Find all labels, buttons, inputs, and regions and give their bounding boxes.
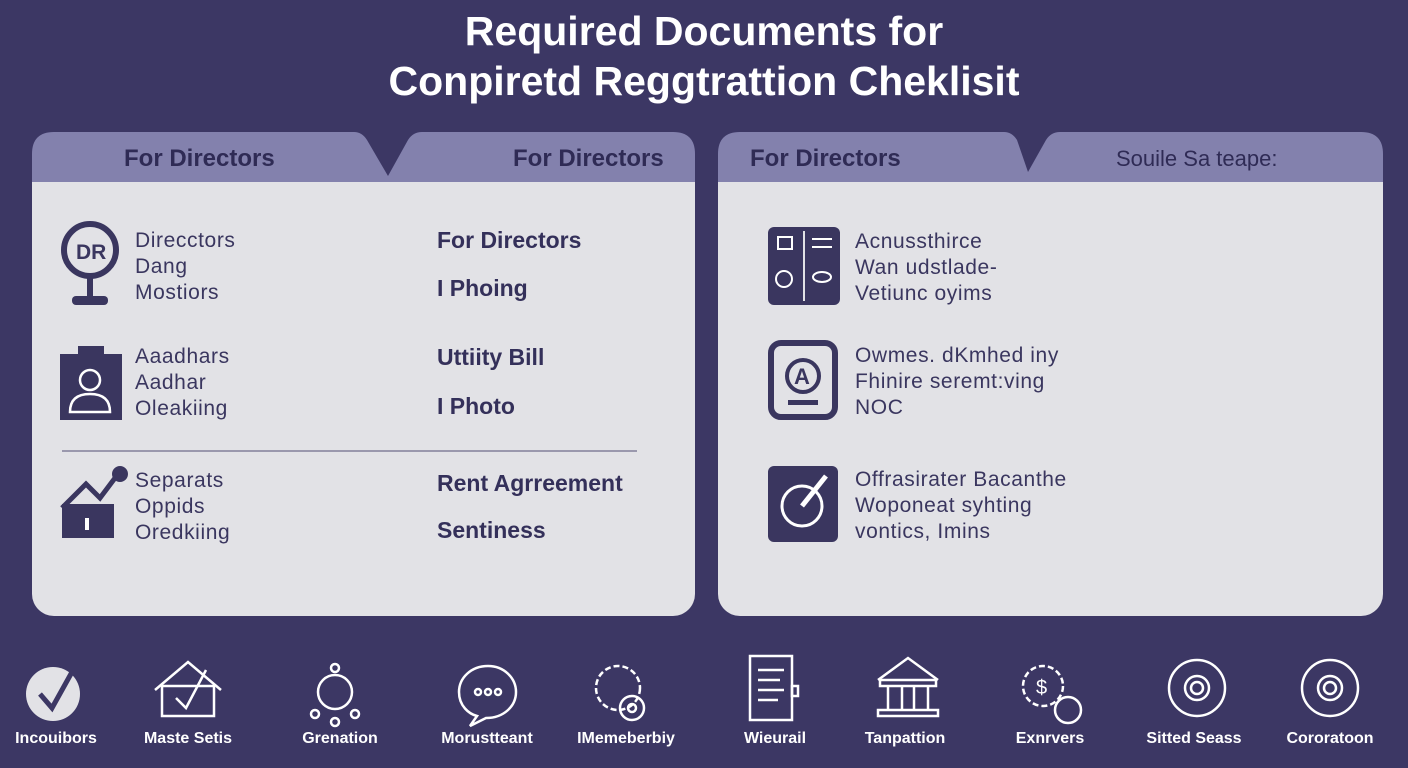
icon: tablet A: A [794,364,810,389]
title [389,8,1020,104]
heading: left tab: For Directors [750,145,901,172]
text block 1: Acnussthirce [855,230,982,253]
text block 2 [855,344,1059,419]
text: Morustteant [441,730,533,747]
icon: disc [1302,660,1358,716]
text: Exnrvers [1016,730,1084,747]
icon: tablet A [768,340,838,420]
icon: bank [878,658,938,716]
text block 3 [135,469,230,544]
text block 1: Mostiors [135,281,219,304]
text block 3: Separats [135,469,224,492]
text: Sitted Seass [1146,730,1242,747]
right column list [437,227,623,543]
text: Wieurail [744,730,806,747]
icon: chart house [60,466,128,538]
icon: gear money: $ [1036,677,1047,699]
text: Maste Setis [144,730,232,747]
text block 3: Oredkiing [135,521,230,544]
text: Grenation [302,730,378,747]
text block 3: Oppids [135,495,205,518]
icon: check [26,667,80,721]
panel: right [718,132,1383,616]
icon: house check [155,662,221,716]
text block 1: Dang [135,255,188,278]
icon: magnifier [61,221,119,305]
text block 1: Direcctors [135,229,236,252]
icon row [26,654,1360,728]
text block 2 [135,345,230,420]
labels: Incouibors [15,730,97,747]
icon: network [311,664,359,726]
text block 3: vontics, Imins [855,520,991,543]
icon: target [1169,660,1225,716]
icon: id badge [60,346,122,420]
text: Tanpattion [865,730,945,747]
text block 3: Woponeat syhting [855,494,1032,517]
text: IMemeberbiy [577,730,675,747]
icon: document [750,656,798,720]
right column list: Uttiity Bill [437,344,544,370]
title: Conpiretd Reggtrattion Cheklisit [389,58,1019,104]
text block 2: NOC [855,396,903,419]
text block 1: Vetiunc oyims [855,282,992,305]
icon: control panel [768,227,840,305]
panel: left [32,132,695,616]
right column list: Sentiness [437,517,546,543]
text block 2: Fhinire seremt:ving [855,370,1045,393]
text block 2: Oleakiing [135,397,228,420]
text block 3 [855,468,1067,543]
text: Cororatoon [1286,730,1374,747]
text block 3: Offrasirater Bacanthe [855,468,1067,491]
heading: right tab: For Directors [513,145,664,172]
icon: gear money [1023,666,1081,723]
right column list: Rent Agrreement [437,470,623,496]
icon: magnifier: DR [76,241,106,264]
right column list: For Directors [437,227,581,253]
text block 1 [135,229,236,304]
icon: gears [596,666,644,720]
text block 2: Owmes. dKmhed iny [855,344,1059,367]
title: Required Documents for [465,8,943,54]
text block 2: Aaadhars [135,345,230,368]
text block 1: Wan udstlade- [855,256,997,279]
heading: left tab: For Directors [124,145,275,172]
icon: chat [459,666,516,726]
heading: right tab: Souile Sa teape: [1116,146,1277,171]
text block 1 [855,230,997,305]
icon: pen dial [768,466,838,542]
right column list: I Photo [437,393,515,419]
text block 2: Aadhar [135,371,206,394]
right column list: I Phoing [437,275,528,301]
